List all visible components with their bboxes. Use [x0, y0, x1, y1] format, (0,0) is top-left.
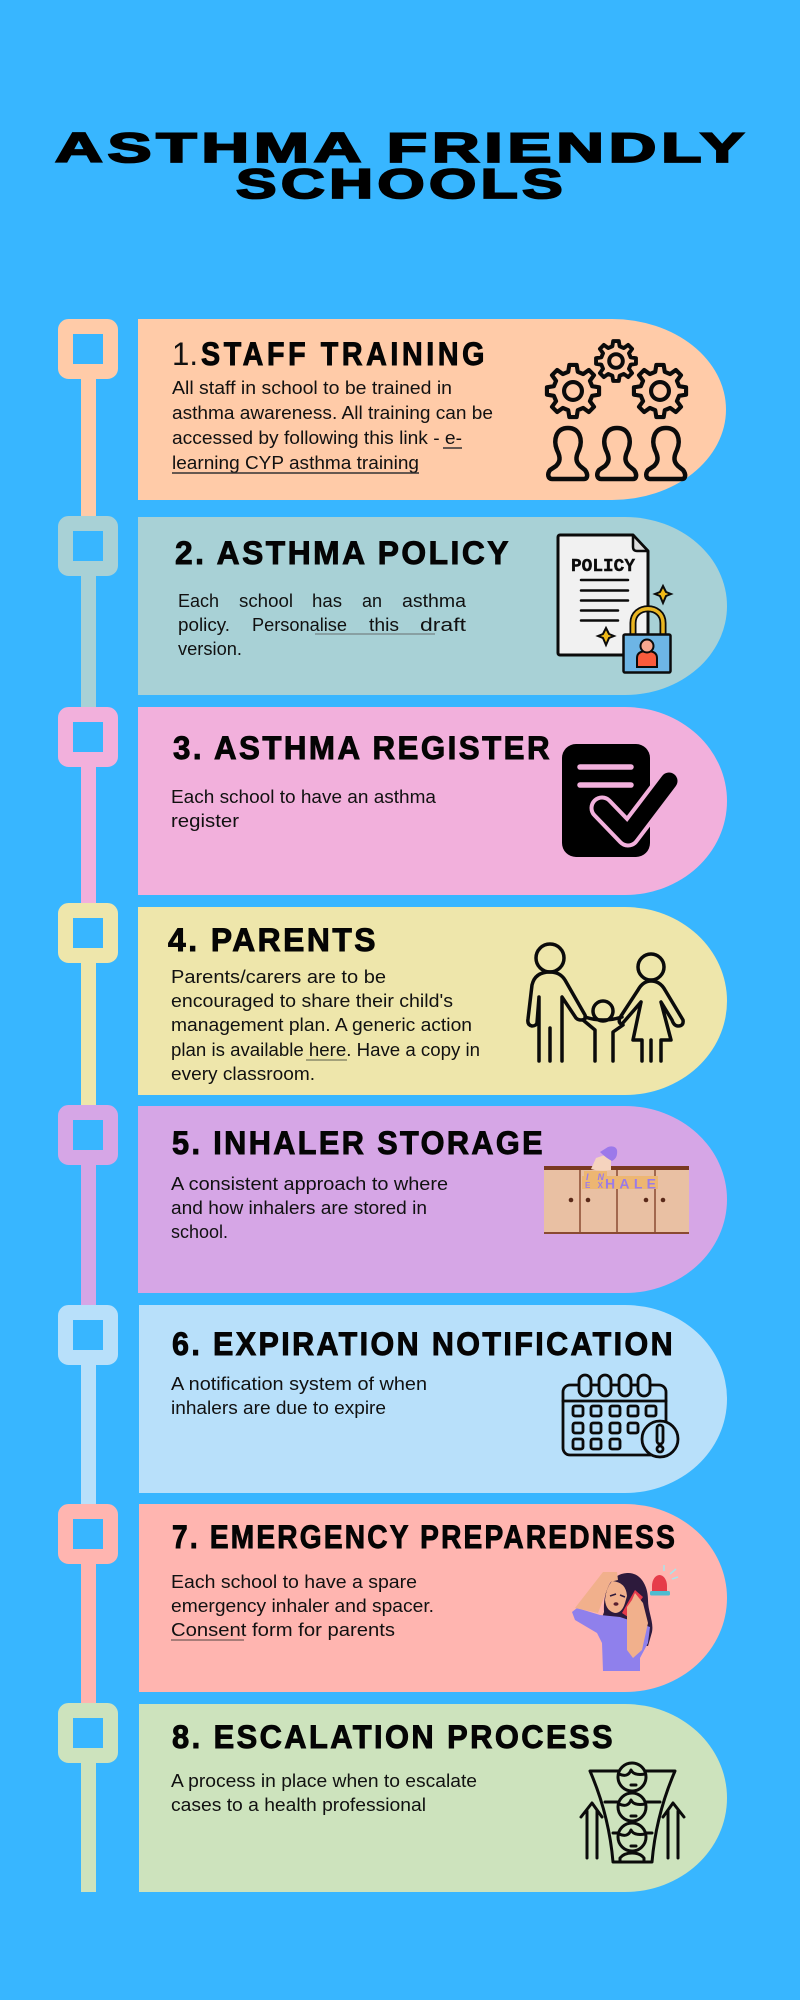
- title: ASTHMA FRIENDLY: [55, 124, 749, 171]
- icon: worried woman on phone with alarm: [572, 1565, 678, 1671]
- text block: [172, 377, 493, 473]
- icon: gears and people: [547, 341, 686, 479]
- icon: family: [528, 944, 683, 1061]
- panel: staff training: [138, 319, 726, 500]
- icon: escalation funnel with people: [581, 1763, 684, 1862]
- text block: Each: [178, 590, 219, 611]
- panel: emergency preparedness: [139, 1504, 727, 1692]
- text block: inhalers are due to expire: [171, 1397, 386, 1418]
- text block: management plan. A generic action: [171, 1014, 472, 1035]
- text block: asthma awareness. All training can be: [172, 402, 493, 423]
- text block: A process in place when to escalate: [171, 1770, 477, 1791]
- text block: [171, 786, 437, 831]
- icon: storage cabinet with blocks: HALE: [605, 1176, 656, 1192]
- text block: [171, 966, 480, 1084]
- title: SCHOOLS: [236, 160, 567, 207]
- panel: asthma register: [138, 707, 727, 895]
- heading: 5. INHALER STORAGE: [172, 1125, 545, 1161]
- text block: encouraged to share their child's: [171, 990, 453, 1011]
- text block: Personalise: [252, 614, 347, 635]
- text block: school.: [171, 1221, 228, 1242]
- heading: 1.: [172, 336, 198, 372]
- text block: A consistent approach to where: [171, 1173, 448, 1194]
- text block: [171, 1770, 477, 1815]
- text block: every classroom.: [171, 1063, 315, 1084]
- text block: Each school to have a spare: [171, 1571, 417, 1592]
- heading: 3. ASTHMA REGISTER: [173, 730, 552, 766]
- panel: parents: [138, 907, 727, 1095]
- text block: accessed by following this link - e-: [172, 427, 462, 448]
- heading: 8. ESCALATION PROCESS: [172, 1719, 615, 1755]
- panel: expiration notification: [139, 1305, 727, 1493]
- text block: cases to a health professional: [171, 1794, 426, 1815]
- panel: asthma policy: [138, 517, 727, 695]
- icon: storage cabinet with blocks: I N: [586, 1172, 604, 1182]
- icon: checklist: [562, 744, 669, 857]
- text block: school: [239, 590, 293, 611]
- icon: policy document with lock: [558, 535, 671, 672]
- text block: asthma: [402, 590, 467, 611]
- panel: inhaler storage: [138, 1106, 727, 1293]
- text block: [171, 1373, 427, 1418]
- heading: 4. PARENTS: [168, 922, 378, 958]
- icon: policy document with lock: POLICY: [571, 557, 635, 577]
- heading: STAFF TRAINING: [201, 336, 488, 372]
- text block: [178, 590, 467, 659]
- heading: 2. ASTHMA POLICY: [175, 535, 511, 571]
- text block: an: [362, 590, 382, 611]
- text block: version.: [178, 638, 242, 659]
- text block: policy.: [178, 614, 230, 635]
- text block: Parents/carers are to be: [171, 966, 386, 987]
- text block: [171, 1173, 448, 1242]
- text block: All staff in school to be trained in: [172, 377, 452, 398]
- text block: draft: [420, 614, 466, 635]
- text block: Each school to have an asthma: [171, 786, 437, 807]
- text block: emergency inhaler and spacer.: [171, 1595, 434, 1616]
- text block: learning CYP asthma training: [172, 452, 419, 473]
- icon: storage cabinet with blocks: E X: [585, 1181, 604, 1190]
- text block: plan is available here. Have a copy in: [171, 1039, 480, 1060]
- text block: Consent form for parents: [171, 1619, 395, 1640]
- text block: has: [312, 590, 342, 611]
- text block: [171, 1571, 434, 1640]
- text block: this: [369, 614, 399, 635]
- title: [55, 124, 749, 207]
- text block: and how inhalers are stored in: [171, 1197, 427, 1218]
- icon: storage cabinet with blocks: [544, 1146, 689, 1234]
- timeline: [66, 326, 110, 1892]
- icon: calendar with alert: [563, 1375, 678, 1457]
- panel: escalation process: [139, 1704, 727, 1892]
- heading: 6. EXPIRATION NOTIFICATION: [172, 1326, 675, 1362]
- heading: 7. EMERGENCY PREPAREDNESS: [172, 1519, 677, 1555]
- text block: register: [171, 810, 239, 831]
- text block: A notification system of when: [171, 1373, 427, 1394]
